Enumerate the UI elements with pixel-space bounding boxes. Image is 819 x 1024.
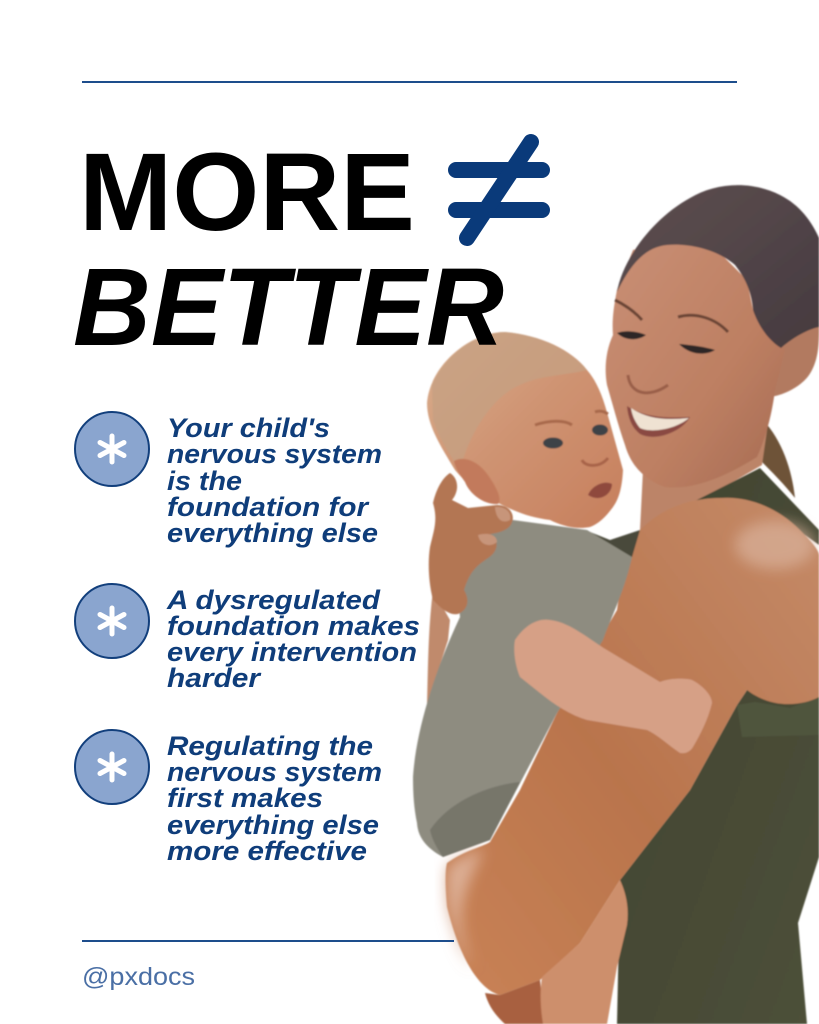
- mother eyes: [617, 331, 715, 354]
- baby leg: [541, 880, 628, 1024]
- onesie lower shading: [430, 782, 520, 857]
- bullet text 3: more effective: [167, 836, 367, 866]
- mother ponytail: [758, 420, 795, 498]
- bullet text 1: everything else: [167, 518, 378, 548]
- baby mouth: [588, 483, 612, 498]
- bullet text 2: A dysregulated: [166, 585, 381, 615]
- bullet icon 2: [75, 584, 149, 658]
- mother tank top: [617, 468, 819, 1024]
- photo: mother and baby: [413, 185, 819, 1024]
- top rule: [82, 81, 737, 83]
- mother hand fingers: [429, 473, 513, 614]
- bullet 3: [75, 730, 382, 866]
- baby hair: [432, 332, 587, 470]
- icon: not-equal sign: [456, 142, 542, 238]
- mother hand on back, long skin strip: [427, 590, 450, 705]
- baby onesie: [413, 520, 632, 857]
- mother upper arm: [446, 498, 819, 995]
- handle: @pxdocs: [82, 963, 195, 991]
- mother neck: [640, 395, 772, 530]
- bullet text 1: [167, 413, 382, 548]
- mother brows: [615, 300, 728, 332]
- bottom rule: [82, 940, 454, 942]
- baby eyes: [543, 438, 563, 448]
- bullet icon 1: [75, 412, 149, 486]
- mother smile: [627, 406, 690, 437]
- bullet text 3: [167, 731, 382, 866]
- bullet text 1: is the: [167, 466, 242, 496]
- mother face: [606, 240, 785, 488]
- bullet 2: [75, 584, 420, 693]
- finger nails: [478, 507, 510, 545]
- shoulder highlight: [735, 521, 815, 569]
- bullet text 2: every intervention: [167, 637, 417, 667]
- bullet text 1: nervous system: [167, 439, 382, 469]
- baby arm: [514, 620, 712, 753]
- mother lower hand: [485, 980, 545, 1024]
- bullet 1: [75, 412, 382, 548]
- bullet text 2: foundation makes: [167, 611, 420, 641]
- bullet text 3: nervous system: [167, 757, 382, 787]
- mother nose shadow: [628, 375, 668, 393]
- bullet icon 3: [75, 730, 149, 804]
- title: MORE: MORE: [79, 131, 415, 254]
- baby head: [427, 332, 623, 528]
- bullet text 1: Your child's: [167, 413, 330, 443]
- mother ear: [770, 320, 819, 397]
- baby ear: [454, 459, 500, 504]
- title: BETTER: BETTER: [73, 246, 504, 369]
- bullet text 2: [166, 585, 420, 693]
- bullet text 3: first makes: [167, 783, 323, 813]
- dark gap behind baby: [585, 530, 640, 600]
- baby nose: [582, 458, 608, 465]
- bullet text 1: foundation for: [167, 492, 370, 522]
- baby brow shadow: [535, 411, 608, 425]
- mother hair: [617, 185, 819, 348]
- bullet text 3: everything else: [167, 810, 379, 840]
- elbow highlight: [446, 848, 484, 968]
- bullet text 2: harder: [167, 663, 262, 693]
- bullet text 3: Regulating the: [167, 731, 373, 761]
- tank top neckband: [737, 697, 819, 737]
